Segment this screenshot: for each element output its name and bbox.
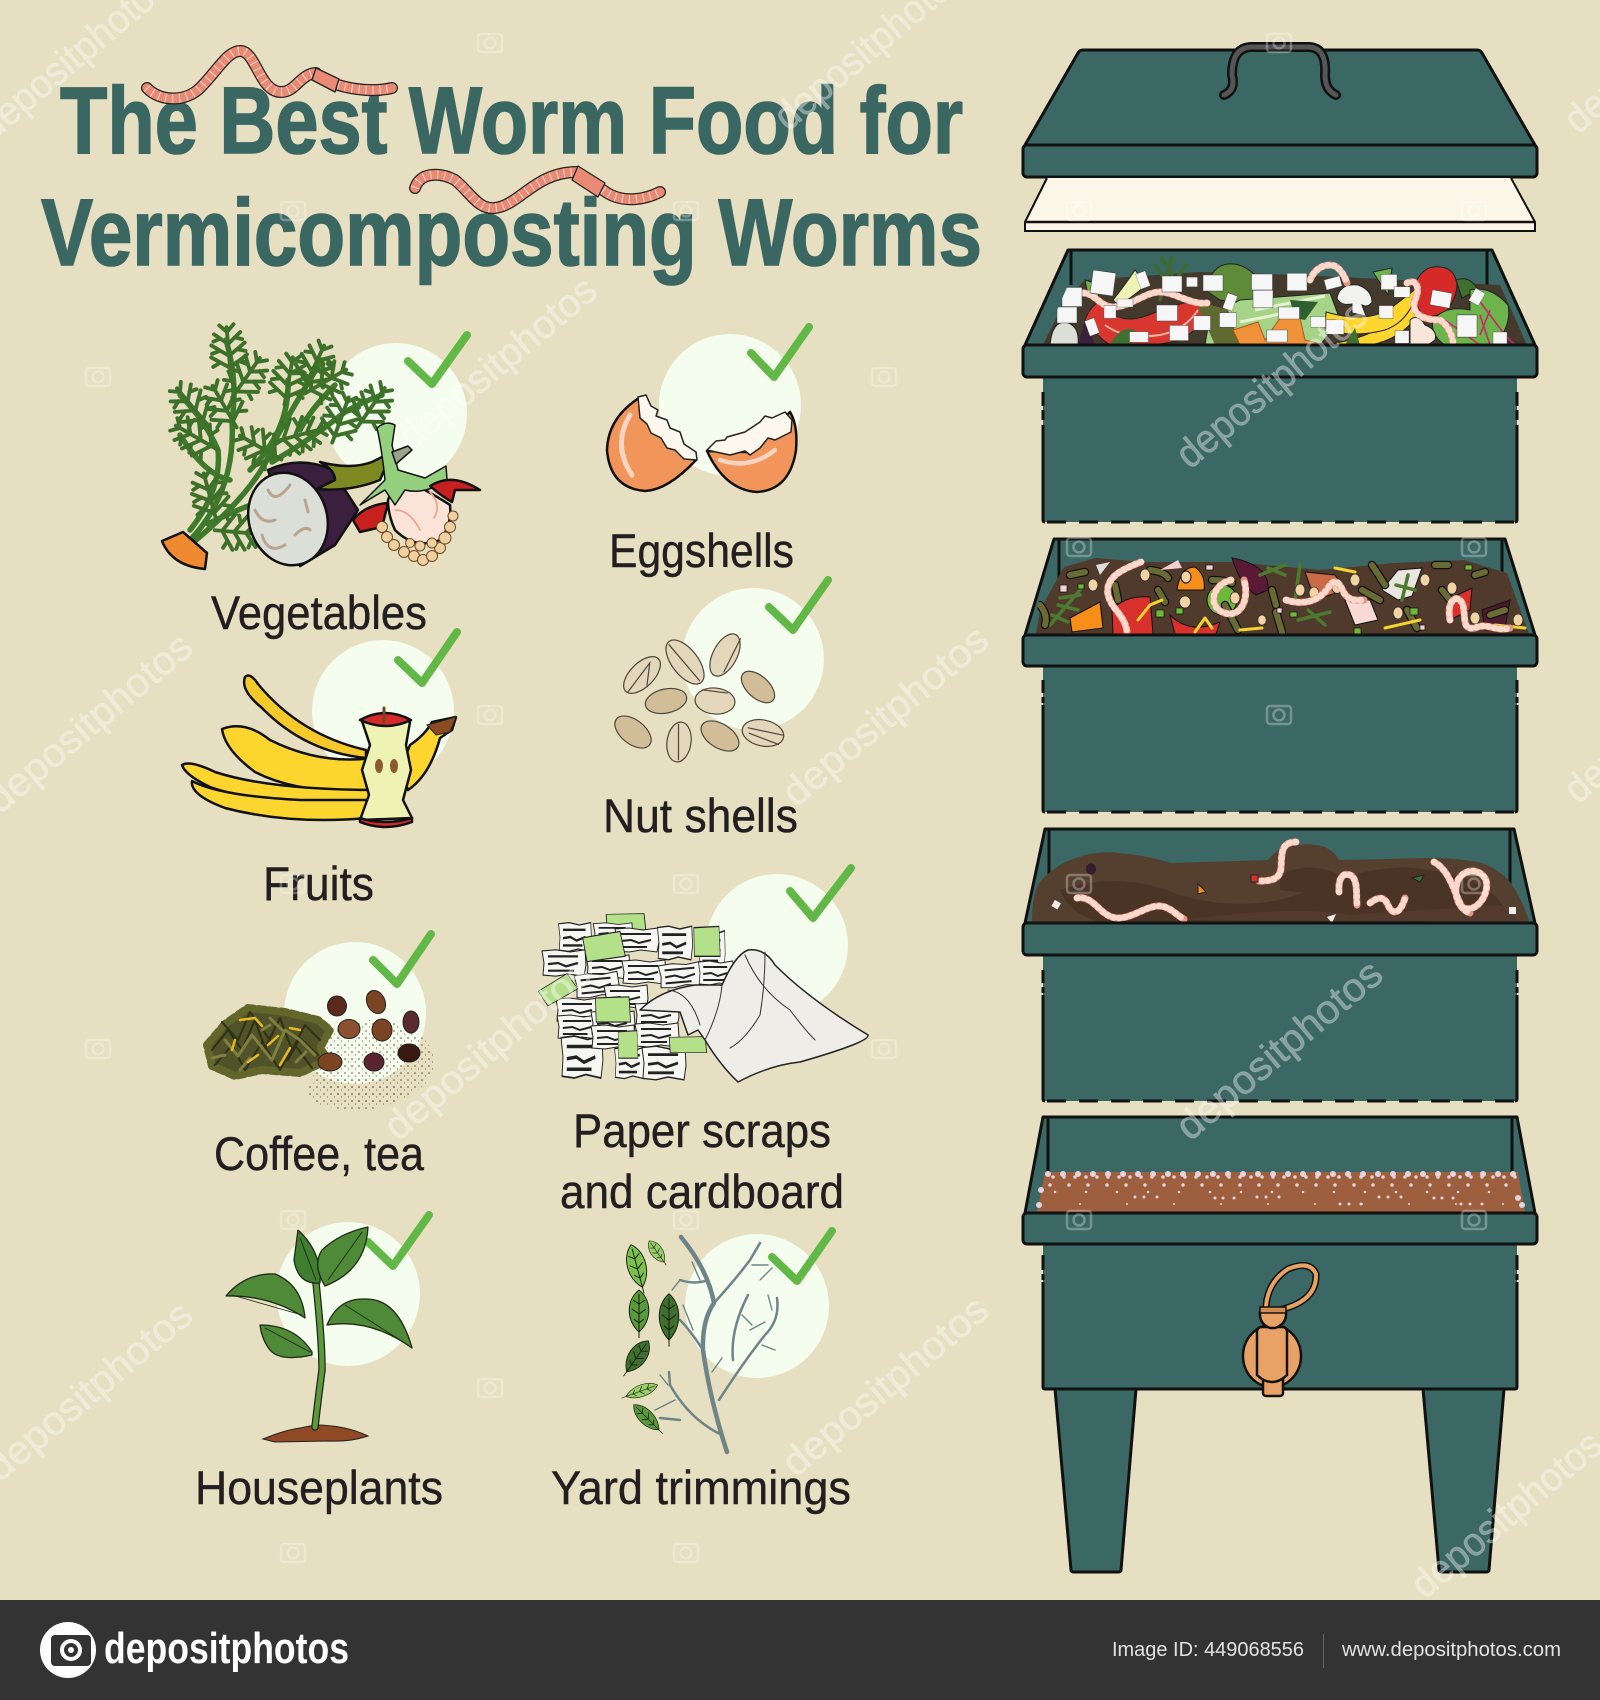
check mark (408, 335, 467, 384)
footer divider (1323, 1634, 1324, 1668)
tier 3 back wall (1025, 829, 1535, 923)
watermarks: depositphotos (1168, 292, 1376, 477)
label: paper scraps and cardboard (560, 1104, 844, 1218)
tier 2 compost with food pieces (1036, 558, 1529, 634)
title line 2: Vermicomposting Worms (41, 180, 982, 286)
tier 3 rim and body (1023, 923, 1537, 1101)
tier 4: gravel base with tap (1023, 1117, 1537, 1572)
highlight circle (706, 874, 848, 1016)
cream fibre mat (1025, 178, 1535, 231)
label: Nut shells (603, 789, 798, 842)
highlight circle (312, 640, 454, 782)
tier 2 rim and body (1023, 635, 1537, 812)
worm on first title line (147, 51, 392, 98)
watermarks: depositphotos (1168, 951, 1391, 1149)
icon: nut shells (609, 629, 786, 763)
lid (1023, 47, 1537, 177)
icon: tap (1243, 1265, 1316, 1396)
panel: yard trimmings (551, 1231, 851, 1514)
icon: onion and pepper scraps (353, 423, 480, 566)
panel: coffee and tea (207, 934, 434, 1180)
watermarks: depositphotos (774, 617, 997, 815)
panel: houseplants (195, 1215, 443, 1514)
tier 1 back wall (1025, 250, 1535, 345)
label: Vegetables (211, 586, 427, 639)
highlight circle (659, 334, 801, 476)
icon: plant (226, 1227, 412, 1442)
worm on second title line (415, 166, 660, 208)
icon: paper scraps (538, 914, 734, 1080)
watermarks: depositphotos (376, 951, 599, 1149)
highlight circle (325, 343, 467, 485)
tier 1 food scraps (1043, 258, 1527, 346)
icon: left eggshell (607, 395, 697, 491)
check mark (790, 868, 851, 918)
check mark (751, 327, 809, 377)
tier 4 gravel layer (1037, 1172, 1525, 1212)
tier 3 compost (1032, 842, 1529, 923)
tier 4 back wall (1025, 1117, 1535, 1213)
title (41, 51, 982, 286)
icon: banana peels (182, 676, 456, 820)
highlight circle (284, 942, 426, 1084)
icon: carrot tops (162, 323, 401, 553)
icon: right eggshell (707, 412, 796, 492)
tier 1 rim and body (1023, 345, 1537, 522)
highlight circle (276, 1222, 420, 1366)
check mark (398, 632, 457, 683)
check mark (368, 1215, 429, 1266)
label: Coffee, tea (214, 1127, 425, 1180)
title line 1: The Best Worm Food for (60, 68, 963, 174)
highlight circle (682, 588, 824, 730)
label: Yard trimmings (551, 1461, 851, 1514)
icon: eggplant piece (236, 452, 392, 576)
icon: lid handle (1224, 47, 1336, 95)
tier 4 rim and body (1023, 1213, 1537, 1389)
legs (1055, 1389, 1504, 1572)
icon: bare branches (655, 1237, 778, 1452)
icon: carrot top stub (162, 532, 207, 569)
label: Fruits (263, 857, 374, 910)
tier 3: finished compost with worms (1023, 829, 1537, 1101)
label: Houseplants (195, 1461, 443, 1514)
tier 1: fresh scraps (1023, 250, 1537, 522)
tier 2 back wall (1025, 539, 1535, 635)
check mark (772, 1231, 832, 1281)
label: paper scraps and cardboard: Paper scraps (573, 1104, 831, 1157)
watermarks: depositphotos (774, 1287, 997, 1485)
image id: Image ID: 449068556 (1112, 1639, 1304, 1661)
check mark (373, 934, 431, 984)
panel: eggshells (607, 327, 809, 577)
panel: vegetables (162, 323, 480, 639)
panel: fruits (182, 632, 457, 910)
icon: coffee grounds (307, 1020, 434, 1110)
check mark (769, 580, 828, 630)
panel: paper scraps and cardboard (538, 868, 868, 1218)
highlight circle (685, 1234, 829, 1378)
label: paper scraps and cardboard: and cardboard (560, 1165, 844, 1218)
tier 2: partly decomposed scraps (1023, 539, 1537, 812)
label: Eggshells (609, 524, 794, 577)
footer logo icon (40, 1622, 96, 1678)
footer logo wordmark: depositphotos (104, 1624, 349, 1673)
icon: coffee beans (318, 987, 420, 1071)
website: www.depositphotos.com (1341, 1639, 1561, 1661)
icon: leaves (616, 1237, 679, 1439)
worm bin (1023, 47, 1537, 1572)
footer bar (0, 1600, 1600, 1700)
watermarks: depositphotos (390, 268, 605, 459)
icon: apple core (360, 708, 412, 827)
icon: crumpled tissue (640, 950, 868, 1082)
icon: tea leaves pile (207, 1008, 330, 1076)
panel: nut shells (603, 580, 828, 842)
